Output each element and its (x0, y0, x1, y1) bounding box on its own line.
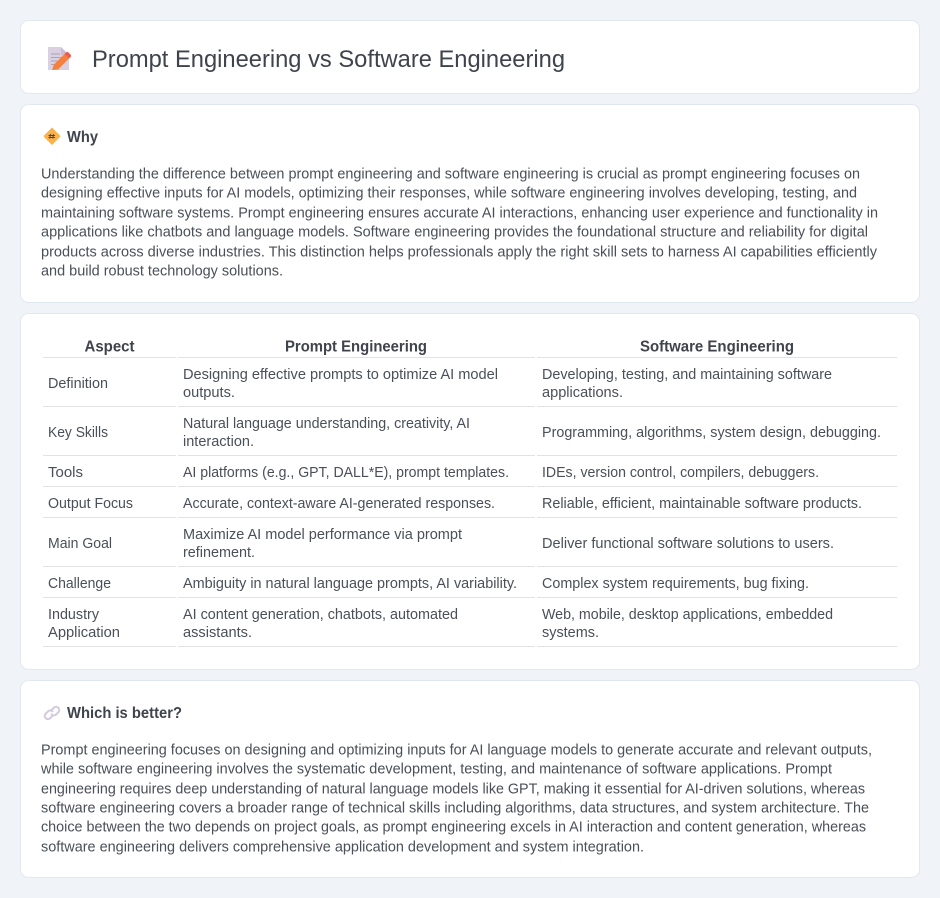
table row: definition: Definition (48, 376, 108, 392)
text block: which is better paragraph: Prompt engineering focuses on designing and optimizing inputs for AI language models to generate accurate and relevant outputs, (41, 742, 872, 758)
text block: which is better paragraph: software engineering delivers comprehensive application development and system integration. (41, 840, 644, 856)
text block: why paragraph: products across diverse industries. This distinction helps professionals apply the right skill sets to harness AI capabilities efficiently (41, 244, 878, 260)
panel: comparison table (20, 314, 920, 670)
table row: output focus: Output Focus (48, 496, 133, 512)
panel: why (20, 104, 920, 302)
text block: why paragraph: Understanding the difference between prompt engineering and software engineering is crucial as prompt engineering focuses on (41, 166, 860, 182)
table row: industry application: Industry (48, 607, 100, 623)
table row: output focus: Accurate, context-aware AI-generated responses. (183, 496, 495, 512)
table row: definition: applications. (542, 385, 623, 401)
text block: why paragraph: designing effective inputs for AI models, optimizing their responses, while software engineering involves developing, testing, and (41, 186, 857, 202)
table row: industry application: Application (48, 625, 120, 641)
table row: key skills: Key Skills (48, 425, 108, 441)
table row: key skills: Programming, algorithms, system design, debugging. (542, 425, 881, 441)
table header row: Software Engineering (640, 338, 794, 356)
table row: definition: outputs. (183, 385, 235, 401)
table row: main goal: Maximize AI model performance via prompt (183, 527, 462, 543)
table header row: Prompt Engineering (285, 338, 427, 356)
table row: main goal: Deliver functional software solutions to users. (542, 536, 834, 552)
icon: warning diamond (44, 128, 60, 145)
table header row: Aspect (84, 338, 135, 356)
table row: main goal: refinement. (183, 545, 255, 561)
title: Prompt Engineering vs Software Engineering (92, 46, 565, 73)
table row: main goal: Main Goal (48, 536, 112, 552)
table row: tools: AI platforms (e.g., GPT, DALL*E), prompt templates. (183, 465, 509, 481)
text block: which is better paragraph: while software engineering involves the systematic development, testing, and maintenance of software applications. Prompt (40, 762, 832, 778)
text block: which is better paragraph (40, 742, 872, 856)
table row: industry application: assistants. (183, 625, 252, 641)
table row: definition (48, 367, 832, 401)
text block: which is better paragraph: software engineering covers a broader range of technical skills including algorithms, data structures, and system architecture. The (41, 800, 869, 816)
table row: industry application: systems. (542, 625, 599, 641)
text block: why paragraph (41, 166, 878, 280)
panel: which is better (20, 680, 920, 878)
table row: industry application: AI content generation, chatbots, automated (183, 607, 458, 623)
table row: challenge: Ambiguity in natural language prompts, AI variability. (183, 576, 517, 592)
text block: why paragraph: applications like chatbots and language models. Software engineering provides the foundational structure and reliability for digital (41, 224, 868, 240)
icon: document with pencil (48, 47, 71, 70)
text block: why paragraph: maintaining software systems. Prompt engineering ensures accurate AI interactions, enhancing user experience and functionality in (41, 206, 878, 222)
table row: tools: IDEs, version control, compilers, debuggers. (542, 465, 819, 481)
table row: challenge (48, 576, 809, 592)
table row: tools: Tools (48, 465, 83, 481)
text block: why paragraph: and build robust technology solutions. (41, 264, 283, 280)
table row: industry application: Web, mobile, desktop applications, embedded (542, 607, 833, 623)
text block: which is better paragraph: engineering requires deep understanding of natural language models like GPT, making it essential for AI-driven solutions, whereas (41, 782, 865, 798)
table row: output focus: Reliable, efficient, maintainable software products. (542, 496, 862, 512)
table row: main goal (48, 527, 834, 561)
text block: which is better paragraph: choice between the two depends on project goals, as prompt engineering excels in AI interaction and content generation, whereas (41, 820, 866, 836)
table row: key skills (48, 416, 881, 450)
table row: industry application (48, 607, 833, 641)
panel: page header (20, 20, 920, 94)
table row: challenge: Complex system requirements, bug fixing. (542, 576, 809, 592)
icon: chain link (45, 707, 59, 719)
table header row (84, 338, 794, 356)
heading: which is better: Which is better? (67, 705, 182, 722)
table row: output focus (48, 496, 862, 512)
table row: definition: Designing effective prompts to optimize AI model (183, 367, 498, 383)
table row: tools (48, 465, 819, 481)
table row: definition: Developing, testing, and maintaining software (542, 367, 832, 383)
table row: key skills: interaction. (183, 434, 254, 450)
table row: key skills: Natural language understanding, creativity, AI (183, 416, 470, 432)
table row: challenge: Challenge (48, 576, 111, 592)
heading: why: Why (67, 129, 98, 146)
